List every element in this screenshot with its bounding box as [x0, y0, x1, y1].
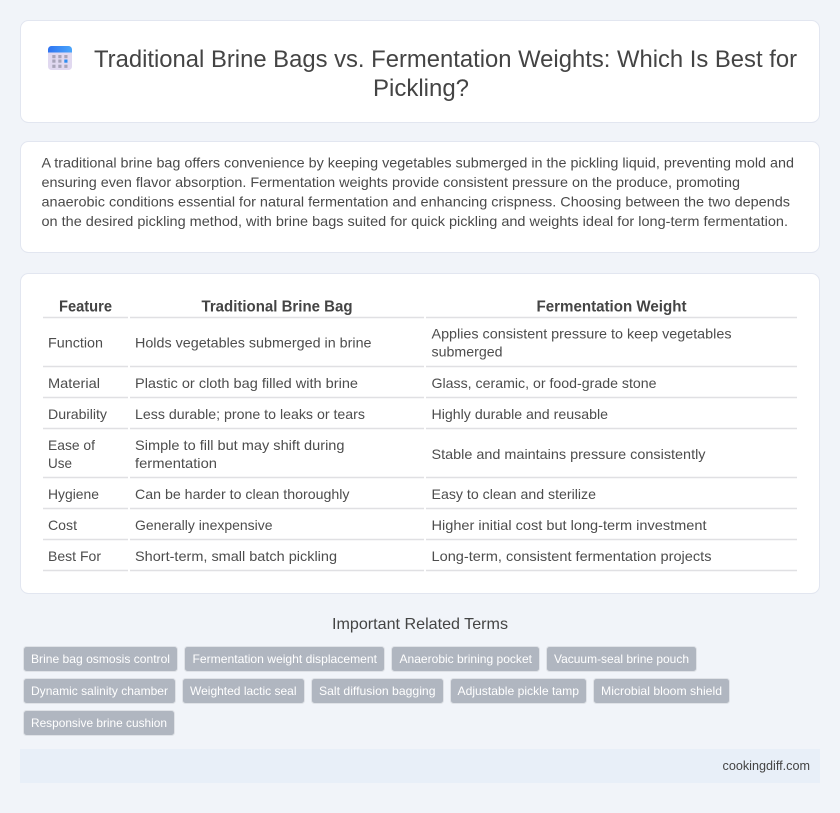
tags: related terms: Weighted lactic seal [190, 684, 296, 698]
panel: comparison table [20, 274, 820, 594]
text block: summary [42, 154, 794, 229]
row: ease of use: Stable and maintains pressure consistently [432, 446, 706, 462]
text block: summary: A traditional brine bag offers convenience by keeping vegetables submerged in the pickling liquid, preventing mold and [42, 154, 794, 170]
row: ease of use: Simple to fill but may shift during [135, 437, 344, 453]
row: material: Material [48, 375, 100, 391]
footer [20, 749, 820, 783]
title [94, 46, 797, 102]
panel: summary text [20, 142, 820, 252]
table header: Traditional Brine Bag [202, 298, 352, 316]
title: Pickling? [373, 75, 469, 102]
row: best for: Best For [48, 548, 101, 564]
row: cost: Generally inexpensive [135, 517, 273, 533]
tags: related terms: Dynamic salinity chamber [31, 684, 168, 698]
row: hygiene [48, 486, 596, 502]
text block: summary: ensuring even flavor absorption. Fermentation weights provide consistent pressure on the produce, promoting [42, 174, 740, 190]
row: hygiene: Can be harder to clean thoroughly [135, 486, 350, 502]
row: durability: Less durable; prone to leaks or tears [135, 406, 365, 422]
row: function [48, 326, 732, 360]
title: Traditional Brine Bags vs. Fermentation Weights: Which Is Best for [94, 46, 797, 73]
row: hygiene: Easy to clean and sterilize [432, 486, 596, 502]
row: function: Holds vegetables submerged in brine [135, 334, 372, 350]
panel: title [20, 20, 820, 122]
row: cost: Higher initial cost but long-term investment [432, 517, 707, 533]
row: material: Plastic or cloth bag filled with brine [135, 375, 358, 391]
table header: Feature [59, 298, 112, 316]
row: function: Function [48, 334, 103, 350]
footer: cookingdiff.com [722, 758, 810, 773]
row: best for: Long-term, consistent fermentation projects [432, 548, 712, 564]
row: best for [48, 548, 712, 564]
tags: related terms: Salt diffusion bagging [319, 684, 436, 698]
text block: summary: on the desired pickling method, with brine bags suited for quick pickling and weights ideal for long-term fermentation. [42, 213, 788, 229]
heading: important related terms: Important Related Terms [332, 616, 508, 633]
tags: related terms: Fermentation weight displacement [192, 652, 378, 666]
tags: related terms: Adjustable pickle tamp [458, 684, 579, 698]
row: function: submerged [432, 344, 502, 360]
row: ease of use: fermentation [135, 455, 217, 471]
row: ease of use: Use [48, 455, 72, 471]
row: cost: Cost [48, 517, 77, 533]
tags: related terms: Brine bag osmosis control [31, 652, 170, 666]
tags: related terms [24, 646, 730, 736]
row: durability [48, 406, 608, 422]
row: hygiene: Hygiene [48, 486, 99, 502]
tags: related terms: Anaerobic brining pocket [400, 652, 533, 666]
text block: summary: anaerobic conditions essential for natural fermentation and enhancing crispness. Choosing between the two depends [42, 194, 790, 210]
row: material: Glass, ceramic, or food-grade stone [432, 375, 657, 391]
row: cost [48, 517, 707, 533]
row: material [48, 375, 657, 391]
row: best for: Short-term, small batch pickling [135, 548, 337, 564]
row: durability: Highly durable and reusable [432, 406, 608, 422]
row: durability: Durability [48, 406, 107, 422]
row: ease of use [48, 437, 706, 471]
tags: related terms: Microbial bloom shield [601, 684, 722, 698]
row: ease of use: Ease of [48, 437, 95, 453]
tags: related terms: Vacuum-seal brine pouch [554, 652, 689, 666]
table header: Fermentation Weight [536, 298, 686, 316]
table header [59, 298, 686, 316]
row: function: Applies consistent pressure to keep vegetables [432, 326, 732, 342]
tags: related terms: Responsive brine cushion [31, 716, 167, 730]
icon: calendar [48, 46, 72, 70]
